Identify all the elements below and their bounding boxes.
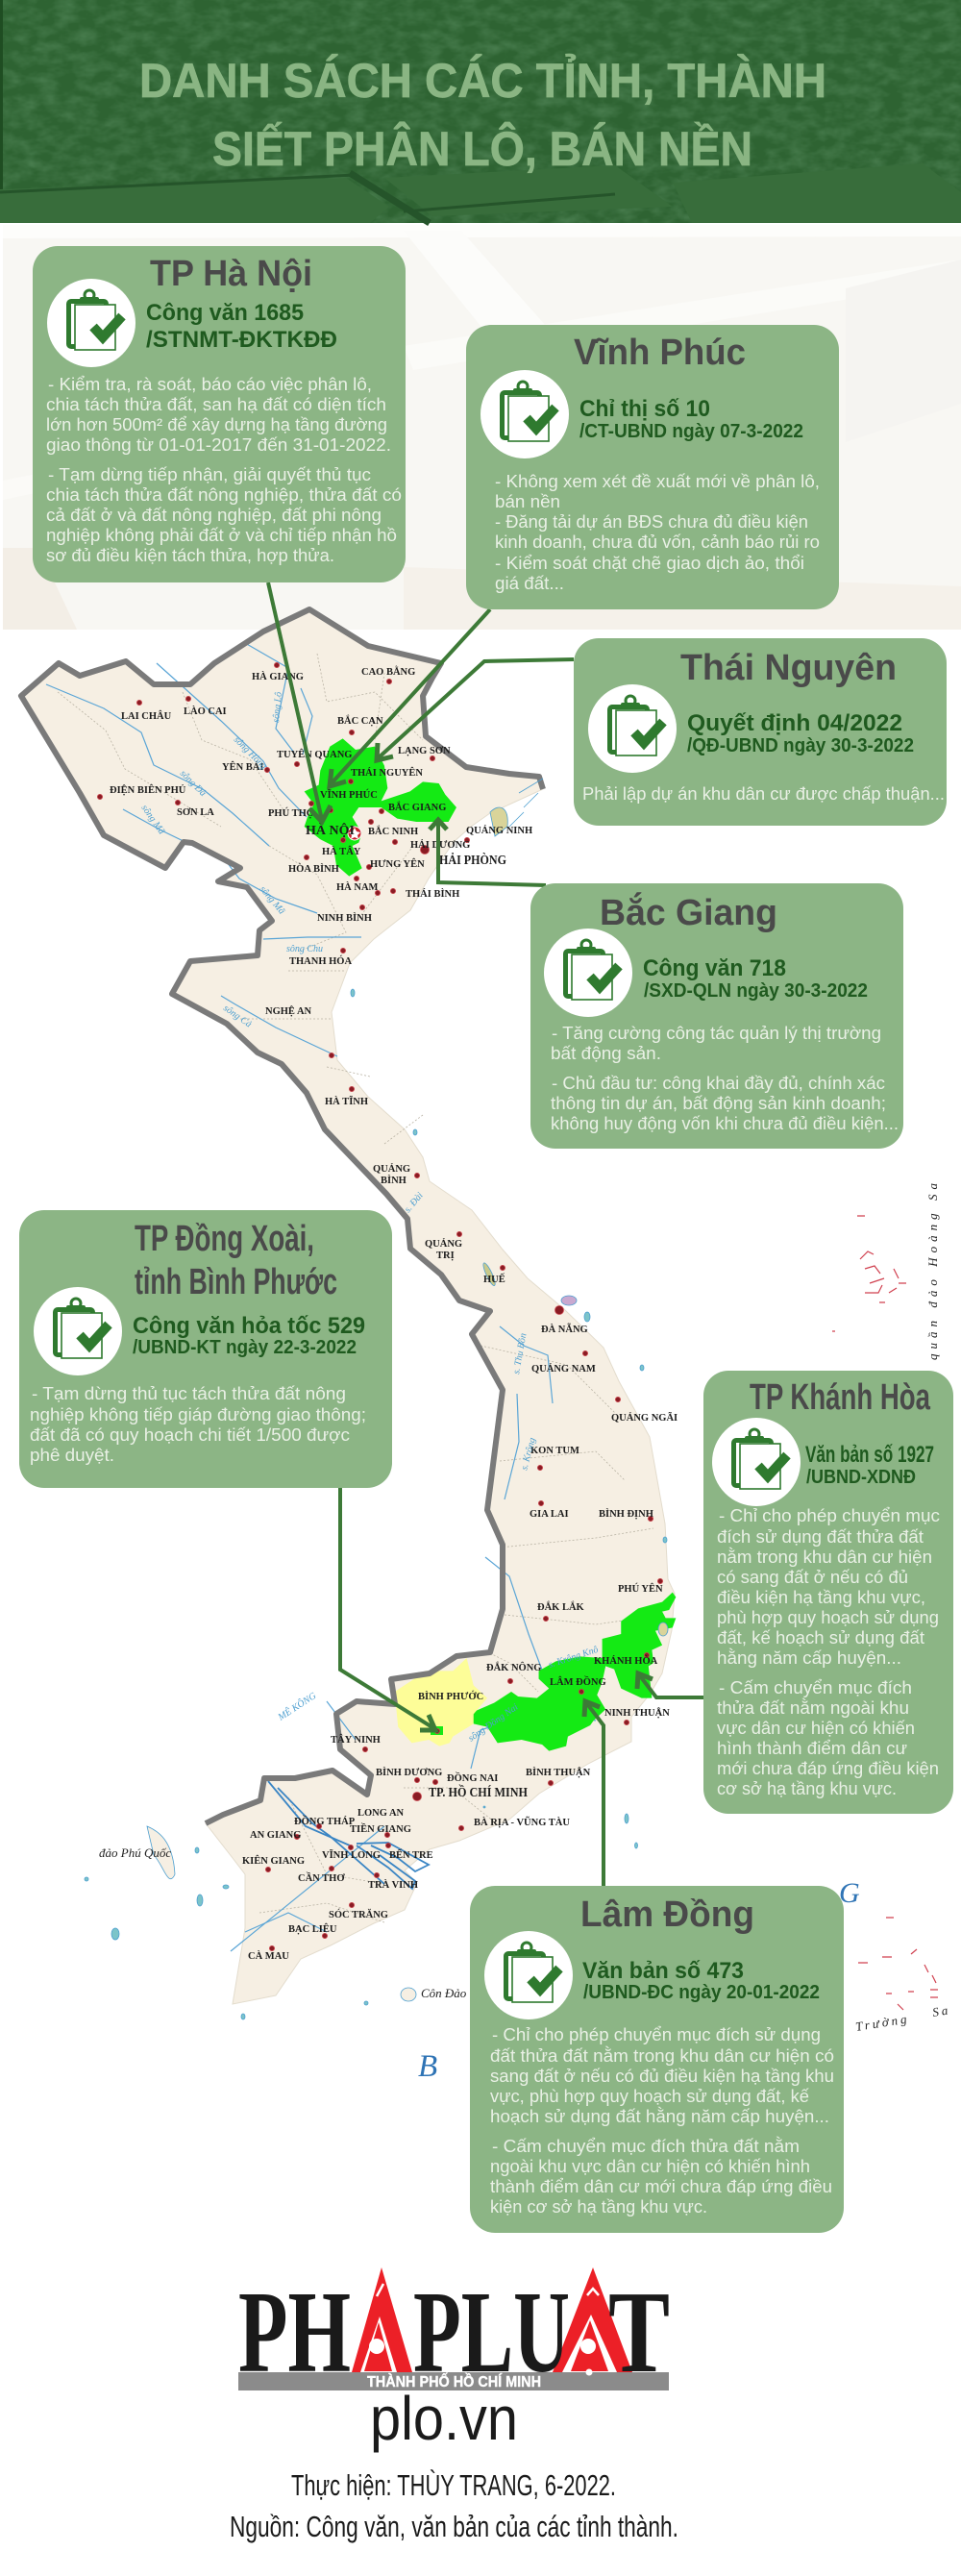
body text: mới chưa đáp ứng điều kiện <box>717 1759 939 1778</box>
river and sea labels: sông Chu <box>286 944 323 954</box>
river and sea labels <box>99 691 600 2000</box>
province labels: ĐẮK NÔNG <box>486 1661 541 1673</box>
river and sea labels: đảo Phú Quốc <box>99 1845 171 1860</box>
body text: kiện cơ sở hạ tầng khu vực. <box>490 2197 707 2217</box>
icon: clipboard with check <box>588 684 677 773</box>
province labels: KIÊN GIANG <box>242 1855 305 1867</box>
river and sea labels: sông Hồng <box>232 734 269 772</box>
icon: clipboard with check <box>712 1418 801 1506</box>
province labels: TRÀ VINH <box>368 1879 418 1891</box>
province labels: TP. HỒ CHÍ MINH <box>429 1783 528 1800</box>
document number <box>805 1442 934 1488</box>
river and sea labels: s. Krông <box>519 1437 538 1472</box>
islands <box>85 779 668 2019</box>
province labels: ĐỒNG NAI <box>447 1771 498 1784</box>
province labels: BẮC GIANG <box>388 801 446 813</box>
province labels: ĐIỆN BIÊN PHỦ <box>110 783 186 796</box>
document number <box>133 1313 365 1358</box>
body text: đất, kế hoạch sử dụng đất <box>717 1628 924 1647</box>
province labels: HẢI PHÒNG <box>439 852 506 868</box>
province labels: HÀ GIANG <box>252 671 304 682</box>
body text: giá đất... <box>495 574 564 593</box>
river and sea labels: s. Đài <box>403 1190 426 1215</box>
connector line: Lâm Đồng <box>584 1701 604 1886</box>
body text: phê duyệt. <box>30 1446 114 1465</box>
province labels: CAO BẰNG <box>361 665 415 678</box>
document number: /CT-UBND ngày 07-3-2022 <box>579 421 803 442</box>
logo: Pháp Luật TP.HCM: T <box>608 2267 670 2397</box>
province labels: THÁI NGUYÊN <box>351 767 423 779</box>
body text: - Tăng cường công tác quản lý thị trường <box>552 1024 881 1043</box>
panel: Vĩnh Phúc <box>466 325 839 609</box>
body text: - Chỉ cho phép chuyển mục đích sử dụng <box>492 2025 821 2044</box>
river and sea labels: sông Đà <box>178 768 208 799</box>
panel: TP Khánh Hòa <box>703 1371 953 1814</box>
title <box>139 54 826 176</box>
body text: đất đã có quy hoạch chi tiết 1/500 được <box>30 1425 350 1445</box>
province labels: HẢI DƯƠNG <box>410 839 470 851</box>
panel: TP Hà Nội <box>33 246 406 582</box>
province labels: BÌNH PHƯỚC <box>418 1691 483 1702</box>
body text: sơ đủ điều kiện tách thửa, hợp thửa. <box>46 546 334 565</box>
province labels: NINH BÌNH <box>317 912 372 924</box>
archipelago labels: Trường <box>854 2011 910 2034</box>
province labels: PHÚ THỌ <box>268 807 314 819</box>
connector line: Thái Nguyên <box>377 659 574 760</box>
body text: có sang đất ở nếu có đủ <box>717 1568 908 1587</box>
connector line: Hà Nội <box>268 582 331 822</box>
river and sea labels: sông Lô <box>271 691 284 723</box>
province labels: KON TUM <box>530 1446 579 1456</box>
logo: Pháp Luật TP.HCM: PLU <box>413 2267 570 2397</box>
province labels: HUẾ <box>483 1273 505 1285</box>
province labels: GIA LAI <box>530 1509 569 1520</box>
body text: bán nền <box>495 492 560 511</box>
province labels: TUYÊN QUANG <box>277 749 352 760</box>
river and sea labels: sông Đồng Nai <box>466 1702 521 1744</box>
province labels: HÀ NAM <box>336 881 379 893</box>
icon: clipboard with check <box>47 279 136 367</box>
connector line: Bắc Giang <box>430 820 546 885</box>
map of Vietnam <box>21 609 951 2084</box>
body text: thông tin dự án, bất động sản kinh doanh; <box>551 1094 886 1113</box>
body text: hoạch sử dụng đất hằng năm cấp huyện... <box>490 2106 829 2126</box>
header band <box>0 0 961 223</box>
title: DANH SÁCH CÁC TỈNH, THÀNH <box>139 54 826 108</box>
highlighted provinces in bright green <box>305 738 676 1751</box>
river and sea labels: s. Krông Knô <box>548 1645 600 1671</box>
province labels: BẾN TRE <box>389 1848 433 1861</box>
credits: Thực hiện: THÙY TRANG, 6-2022. <box>291 2468 616 2502</box>
province labels: BẮC CẠN <box>337 714 383 727</box>
body text: kinh doanh, chưa đủ vốn, cảnh báo rủi ro <box>495 533 820 552</box>
document number <box>579 396 803 442</box>
province labels: YÊN BÁI <box>222 761 263 773</box>
province labels: QUẢNG <box>425 1238 462 1250</box>
body text: - Cấm chuyển mục đích <box>719 1678 912 1697</box>
body text <box>717 1506 940 1798</box>
Hoàng Sa and Trường Sa red island marks <box>832 1216 938 2010</box>
document number <box>687 710 914 756</box>
body text: - Không xem xét đề xuất mới về phân lô, <box>495 472 820 491</box>
river and sea labels: MÊ KÔNG <box>275 1690 318 1723</box>
river and sea labels: s. Thu Bồn <box>511 1332 529 1375</box>
archipelago labels: Sa <box>931 2002 951 2019</box>
body text: phù hợp quy hoạch sử dụng <box>717 1608 939 1627</box>
body text: - Cấm chuyển mục đích thửa đất nằm <box>492 2136 800 2156</box>
grey land border <box>21 609 543 1823</box>
body text: vực, phù hợp quy hoạch sử dụng đất, kế <box>490 2087 809 2106</box>
document number: /UBND-XDNĐ <box>806 1467 916 1488</box>
heading: tỉnh Bình Phước <box>135 1262 337 1302</box>
body text: cả đất ở và đất nông nghiệp, đất phi nông <box>46 506 382 525</box>
city markers <box>97 662 663 1951</box>
document number: Quyết định 04/2022 <box>687 710 902 736</box>
province labels: CÀ MAU <box>248 1950 289 1962</box>
body text: lớn hơn 500m² để xây dựng hạ tầng đường <box>46 415 387 434</box>
website: plo.vn <box>370 2384 518 2453</box>
province labels: HÒA BÌNH <box>288 863 339 875</box>
body text: - Kiểm tra, rà soát, báo cáo việc phân lô, <box>48 375 372 394</box>
body text: bất động sản. <box>551 1044 661 1063</box>
body text <box>30 1384 366 1465</box>
body text: - Đăng tải dự án BĐS chưa đủ điều kiện <box>495 512 808 532</box>
document number: /QĐ-UBND ngày 30-3-2022 <box>687 735 914 756</box>
body text: không huy động vốn khi chưa đủ điều kiện... <box>551 1114 899 1133</box>
heading <box>135 1219 337 1302</box>
logo: Pháp Luật TP.HCM: PH <box>238 2267 351 2397</box>
province labels <box>110 665 678 1962</box>
province labels: VĨNH LONG <box>322 1849 381 1861</box>
province labels: THANH HÓA <box>289 955 352 967</box>
body text: - Tạm dừng thủ tục tách thửa đất nông <box>32 1384 346 1403</box>
province labels: HÀ NỘI <box>306 822 355 838</box>
province labels: ĐÀ NẴNG <box>541 1323 588 1335</box>
province labels: QUẢNG NGÃI <box>611 1412 678 1424</box>
province labels: TIỀN GIANG <box>350 1822 411 1835</box>
credits <box>230 2468 678 2543</box>
province labels: HÀ TÂY <box>322 846 361 857</box>
Bình Phước province in yellow <box>395 1658 487 1746</box>
body text <box>495 472 820 593</box>
body text <box>490 2025 834 2217</box>
province labels: THÁI BÌNH <box>406 888 459 900</box>
province labels: KHÁNH HÒA <box>594 1655 658 1667</box>
province labels: BÌNH DƯƠNG <box>376 1767 442 1778</box>
title: SIẾT PHÂN LÔ, BÁN NỀN <box>212 121 752 176</box>
body text: - Kiểm soát chặt chẽ giao dịch ảo, thổi <box>495 554 804 573</box>
body text: nghiệp không tiếp giáp đường giao thông; <box>30 1405 366 1424</box>
Đồng Xoài green patch <box>431 1726 443 1735</box>
document number: Công văn 1685 <box>146 300 304 326</box>
province labels: NINH THUẬN <box>604 1706 670 1719</box>
body text <box>551 1024 899 1133</box>
province labels: LONG AN <box>357 1808 405 1819</box>
river and sea labels: Côn Đảo <box>421 1986 467 2000</box>
province labels: BÀ RỊA - VŨNG TÀU <box>474 1817 570 1828</box>
heading: Thái Nguyên <box>680 648 897 688</box>
province boundaries <box>58 654 663 1922</box>
province labels: CẦN THƠ <box>298 1871 345 1884</box>
panel: TP Đồng Xoài, tỉnh Bình Phước <box>19 1210 392 1488</box>
province labels: LÂM ĐỒNG <box>550 1675 606 1688</box>
icon: clipboard with check <box>544 929 632 1017</box>
province labels: HÀ TĨNH <box>325 1096 368 1107</box>
province labels: ĐỒNG THÁP <box>294 1815 356 1827</box>
icon: clipboard with check <box>34 1287 122 1375</box>
province labels: BẠC LIÊU <box>288 1923 337 1935</box>
river and sea labels: sông Cả <box>221 1003 254 1029</box>
province labels: TÂY NINH <box>331 1734 381 1746</box>
body text: thành điểm dân cư mới chưa đáp ứng điều <box>490 2177 832 2196</box>
panel: Lâm Đồng <box>470 1886 844 2233</box>
body text: vực dân cư hiện có khiến <box>717 1719 915 1738</box>
panel: Bắc Giang <box>530 883 903 1149</box>
province labels: SÓC TRĂNG <box>329 1909 388 1920</box>
body text: hình thành điểm dân cư <box>717 1739 907 1758</box>
icon: clipboard with check <box>480 370 569 458</box>
document number: /STNMT-ĐKTKĐĐ <box>146 327 337 353</box>
panel: Thái Nguyên <box>574 638 947 826</box>
body text: - Chỉ cho phép chuyển mục <box>719 1506 940 1525</box>
document number: /UBND-KT ngày 22-3-2022 <box>133 1337 357 1358</box>
province labels: ĐẮK LẮK <box>537 1600 585 1613</box>
logo: Pháp Luật TP.HCM <box>238 2267 670 2397</box>
document number: Công văn hỏa tốc 529 <box>133 1313 365 1339</box>
body text: nghiệp không phải đất ở và chỉ tiếp nhận hồ <box>46 526 397 545</box>
Hà Nội capital star <box>348 827 361 840</box>
heading: TP Hà Nội <box>150 254 312 294</box>
province labels: BÌNH ĐỊNH <box>599 1508 653 1520</box>
province labels: PHÚ YÊN <box>618 1583 663 1595</box>
document number <box>582 1958 820 2003</box>
document number: Chỉ thị số 10 <box>579 396 710 422</box>
logo: Pháp Luật TP.HCM: THÀNH PHỐ HỒ CHÍ MINH <box>367 2371 541 2390</box>
connector line: Khánh Hòa <box>637 1673 703 1697</box>
body text: thửa đất nằm ngoài khu <box>717 1697 909 1718</box>
province labels: TRỊ <box>436 1251 455 1261</box>
credits: Nguồn: Công văn, văn bản của các tỉnh thành. <box>230 2510 678 2543</box>
archipelago labels <box>854 1180 951 2034</box>
document number: /SXD-QLN ngày 30-3-2022 <box>644 980 868 1002</box>
heading: Vĩnh Phúc <box>574 333 746 373</box>
body text: hằng năm cấp huyện... <box>717 1647 901 1668</box>
body text: chia tách thửa đất nông nghiệp, thửa đất có <box>46 485 402 505</box>
body text: - Tạm dừng tiếp nhận, giải quyết thủ tục <box>48 465 371 484</box>
land mass <box>21 609 675 2004</box>
province labels: BẮC NINH <box>368 825 418 837</box>
faint aerial background photo <box>3 225 961 630</box>
document number <box>146 300 337 353</box>
document number: Công văn 718 <box>643 955 786 981</box>
body text: chia tách thửa đất, san hạ đất có diện tích <box>46 395 386 414</box>
document number <box>643 955 868 1002</box>
connector line: Đồng Xoài <box>340 1488 435 1730</box>
document number: Văn bản số 473 <box>582 1958 744 1984</box>
heading: Lâm Đồng <box>580 1895 754 1935</box>
province labels: HƯNG YÊN <box>370 858 425 870</box>
body text: điều kiện hạ tầng khu vực, <box>717 1588 925 1607</box>
icon: clipboard with check <box>484 1931 573 2019</box>
body text <box>46 375 402 565</box>
sea name letters: B <box>418 2049 437 2084</box>
province labels: AN GIANG <box>250 1830 301 1841</box>
sea name letters: G <box>839 1877 860 1909</box>
province labels: QUẢNG NAM <box>531 1363 596 1375</box>
body text: giao thông từ 01-01-2017 đến 31-01-2022. <box>46 435 391 455</box>
province labels: SƠN LA <box>177 807 214 818</box>
heading: TP Đồng Xoài, <box>135 1219 314 1259</box>
province labels: BÌNH THUẬN <box>526 1766 591 1778</box>
body text: - Chủ đầu tư: công khai đầy đủ, chính xác <box>552 1074 885 1093</box>
river and sea labels: sông Mã <box>258 884 286 917</box>
body text: sang đất ở nếu có đủ điều kiện hạ tầng khu <box>490 2067 834 2086</box>
rivers <box>46 643 596 1951</box>
heading: Bắc Giang <box>600 891 777 933</box>
river and sea labels: sông Mã <box>139 803 166 836</box>
province labels: BÌNH <box>381 1175 407 1186</box>
body text: ngoài khu vực dân cư hiện có khiến hình <box>490 2157 810 2176</box>
province labels: LẠNG SƠN <box>398 746 451 756</box>
body text: cơ sở hạ tầng khu vực. <box>717 1779 897 1798</box>
province labels: QUẢNG <box>373 1163 410 1175</box>
body text: đất thửa đất nằm trong khu dân cư hiện có <box>490 2045 834 2066</box>
province labels: LAI CHÂU <box>121 710 172 722</box>
connector line: Vĩnh Phúc <box>330 609 490 786</box>
document number: /UBND-ĐC ngày 20-01-2022 <box>583 1982 820 2003</box>
province labels: NGHỆ AN <box>265 1004 312 1017</box>
body text: nằm trong khu dân cư hiện <box>717 1547 932 1567</box>
archipelago labels: quần đảo Hoàng Sa <box>925 1180 940 1360</box>
province labels: QUẢNG NINH <box>466 825 532 836</box>
sea name letters <box>418 1877 860 2084</box>
body text: đích sử dụng đất thửa đất <box>717 1527 924 1547</box>
province labels: VĨNH PHÚC <box>320 789 378 801</box>
province labels: LÀO CAI <box>184 706 227 717</box>
body text: Phải lập dự án khu dân cư được chấp thuận... <box>582 784 945 804</box>
